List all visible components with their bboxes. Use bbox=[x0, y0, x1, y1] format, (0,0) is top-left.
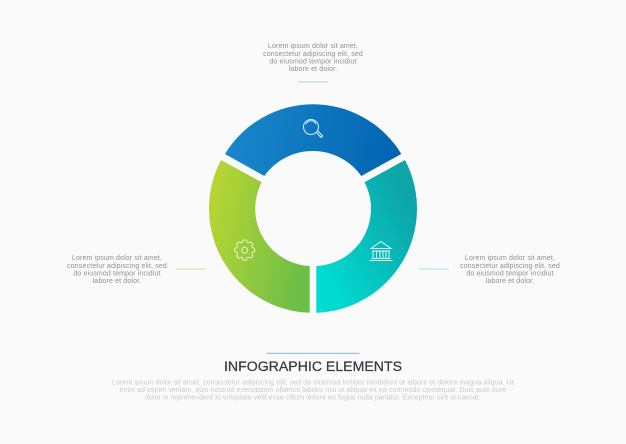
title: INFOGRAPHIC ELEMENTS bbox=[224, 359, 402, 374]
callout: left text: labore et dolor. bbox=[93, 278, 141, 285]
callout: top text: labore et dolor. bbox=[289, 66, 337, 73]
callout: left text: Lorem ipsum dolor sit amet, bbox=[72, 255, 162, 262]
footer text block: dolor in reprehenderit in voluptate velit esse cillum dolore eu fugiat nulla pariatur. Excepteur sint occaecat. bbox=[145, 394, 481, 402]
callout: top text: do eiusmod tempor incidiut bbox=[269, 58, 357, 66]
title rule bbox=[266, 353, 360, 354]
callout: left text: consectetur adipiscing elit, sed bbox=[67, 263, 167, 270]
callout: top text: consectetur adipiscing elit, sed bbox=[263, 51, 363, 58]
callout: right text: consectetur adipiscing elit, sed bbox=[460, 263, 560, 270]
footer text block: enim ad minim veniam, quis nostrud exercitation ullamco laboris nisi ut aliquip ex ea commodo consequat. Duis aute irure bbox=[120, 387, 506, 394]
callout: right text: Lorem ipsum dolor sit amet, bbox=[465, 255, 555, 262]
callout: right text: do eiusmod tempor incidiut bbox=[466, 270, 554, 278]
footer text block bbox=[112, 380, 514, 402]
segment: green left bbox=[209, 160, 310, 313]
callout: left text: do eiusmod tempor incidiut bbox=[73, 270, 161, 278]
callout: right text bbox=[460, 255, 560, 285]
footer text block: Lorem ipsum dolor sit amet, consectetur adipiscing elit, sed do eiusmod tempor incididunt ut labore et dolore magna aliqua. Ut bbox=[112, 380, 514, 386]
icon: bank building bbox=[370, 242, 392, 260]
callout: top text: Lorem ipsum dolor sit amet, bbox=[268, 43, 358, 50]
top connector line bbox=[298, 82, 328, 83]
icon: gear bbox=[235, 240, 255, 260]
donut chart bbox=[209, 104, 417, 313]
segment: teal right bbox=[316, 160, 417, 313]
callout: top text bbox=[263, 43, 363, 73]
segment: blue top bbox=[225, 104, 401, 176]
callout: right text: labore et dolor. bbox=[486, 278, 534, 285]
icon: magnifying glass bbox=[304, 120, 322, 138]
left connector line bbox=[176, 268, 206, 270]
callout: left text bbox=[67, 255, 167, 285]
right connector line bbox=[419, 268, 449, 270]
